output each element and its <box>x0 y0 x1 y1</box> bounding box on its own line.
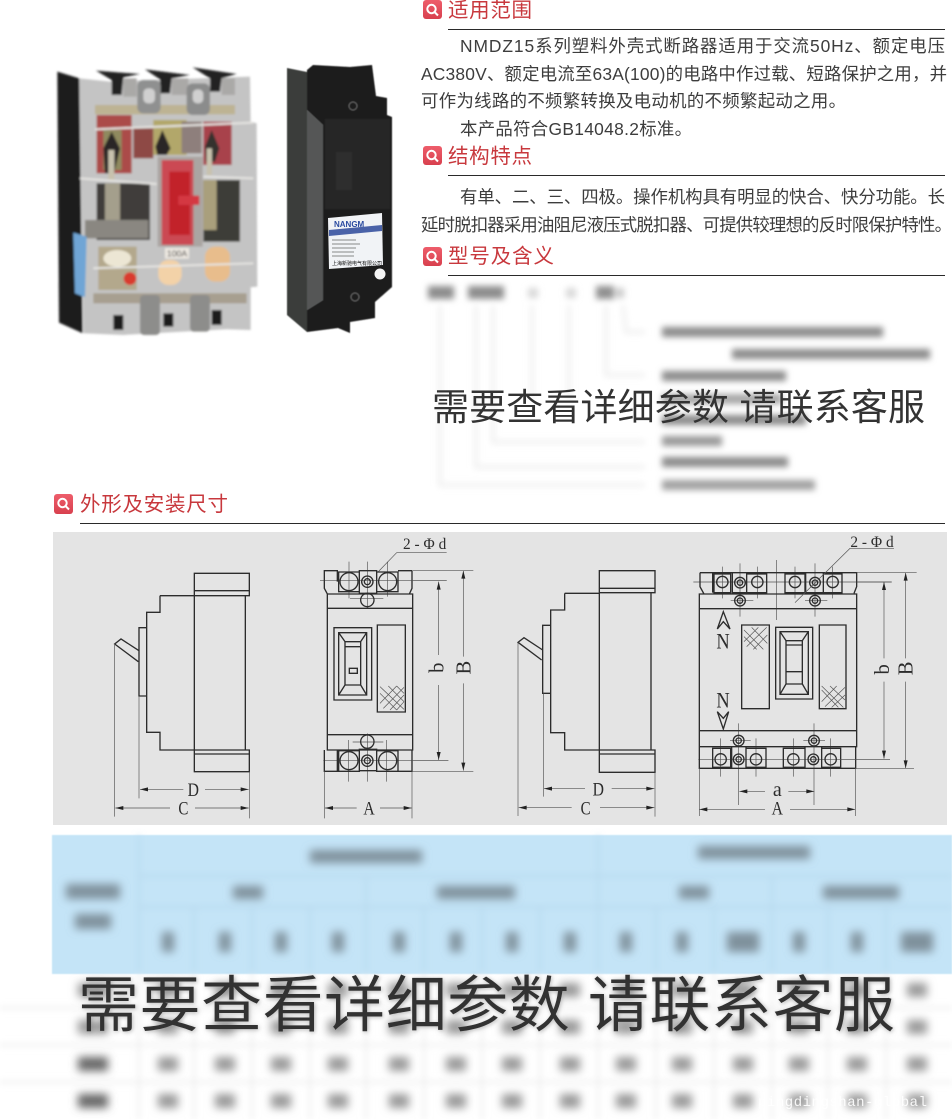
heading: 外形及安装尺寸 <box>80 493 228 516</box>
body text: 有单、二、三、四极。操作机构具有明显的快合、快分功能。长 <box>460 187 945 207</box>
icon: magnifier <box>423 146 442 165</box>
body text: AC380V、额定电流至63A(100)的电路中作过载、短路保护之用，并 <box>421 64 947 84</box>
watermark: upper contact notice: 需要查看详细参数 请联系客服 <box>432 387 925 428</box>
blurred model diagram <box>428 286 930 490</box>
nameplate <box>328 213 383 269</box>
panel: dimension drawings <box>53 532 947 825</box>
label A: A <box>772 799 783 820</box>
label C: C <box>581 798 591 819</box>
watermark: source tag: pingdingshan-global <box>758 1095 927 1111</box>
drawing: four-pole side view <box>518 571 655 819</box>
label B: B <box>454 661 476 675</box>
red indicator <box>124 272 136 285</box>
drawing: two-pole front view <box>320 536 476 820</box>
side blue label <box>73 233 87 297</box>
photo: black circuit breaker <box>287 65 392 333</box>
rating label: 100A <box>167 249 187 259</box>
label A: A <box>363 799 375 820</box>
body text: 可作为线路的不频繁转换及电动机的不频繁起动之用。 <box>421 91 846 111</box>
body text <box>421 36 947 139</box>
label C: C <box>178 799 188 820</box>
heading: 结构特点 <box>448 145 532 168</box>
icon: magnifier <box>54 494 73 514</box>
label 2-Φd: 2-Φd <box>850 534 894 551</box>
body text: 本产品符合GB14048.2标准。 <box>460 119 692 139</box>
icon: magnifier <box>423 247 442 266</box>
section: dimensions heading <box>54 493 945 524</box>
label b: b <box>427 663 449 673</box>
watermark: lower contact notice: 需要查看详细参数 请联系客服 <box>78 971 895 1039</box>
nameplate: 上海新驰电气有限公司 <box>332 260 382 267</box>
drawing: two-pole side view <box>115 573 249 820</box>
N marks: N <box>716 629 730 654</box>
label a: a <box>773 779 782 801</box>
body text: 延时脱扣器采用油阻尼液压式脱扣器、可提供较理想的反时限保护特性。 <box>421 215 952 235</box>
body text: NMDZ15系列塑料外壳式断路器适用于交流50Hz、额定电压 <box>460 36 945 56</box>
icon: magnifier <box>423 0 442 19</box>
table: blurred dimension parameters <box>0 835 952 1119</box>
drawing: four-pole front view <box>693 534 918 820</box>
photo: transparent circuit breaker <box>57 67 257 335</box>
table header band <box>52 835 952 974</box>
N marks <box>716 629 730 712</box>
label D: D <box>593 779 604 800</box>
label b: b <box>872 664 894 674</box>
label 2-Φd: 2-Φd <box>403 536 447 553</box>
section: application scope <box>421 0 947 139</box>
nameplate: NANGM <box>334 220 365 229</box>
body text <box>421 187 952 235</box>
white indicator dot <box>374 268 386 280</box>
N marks: N <box>716 687 730 712</box>
heading: 型号及含义 <box>448 245 554 268</box>
section: structural features <box>421 145 952 235</box>
label B: B <box>896 661 918 675</box>
section: model meaning <box>423 245 945 490</box>
label D: D <box>188 780 199 801</box>
